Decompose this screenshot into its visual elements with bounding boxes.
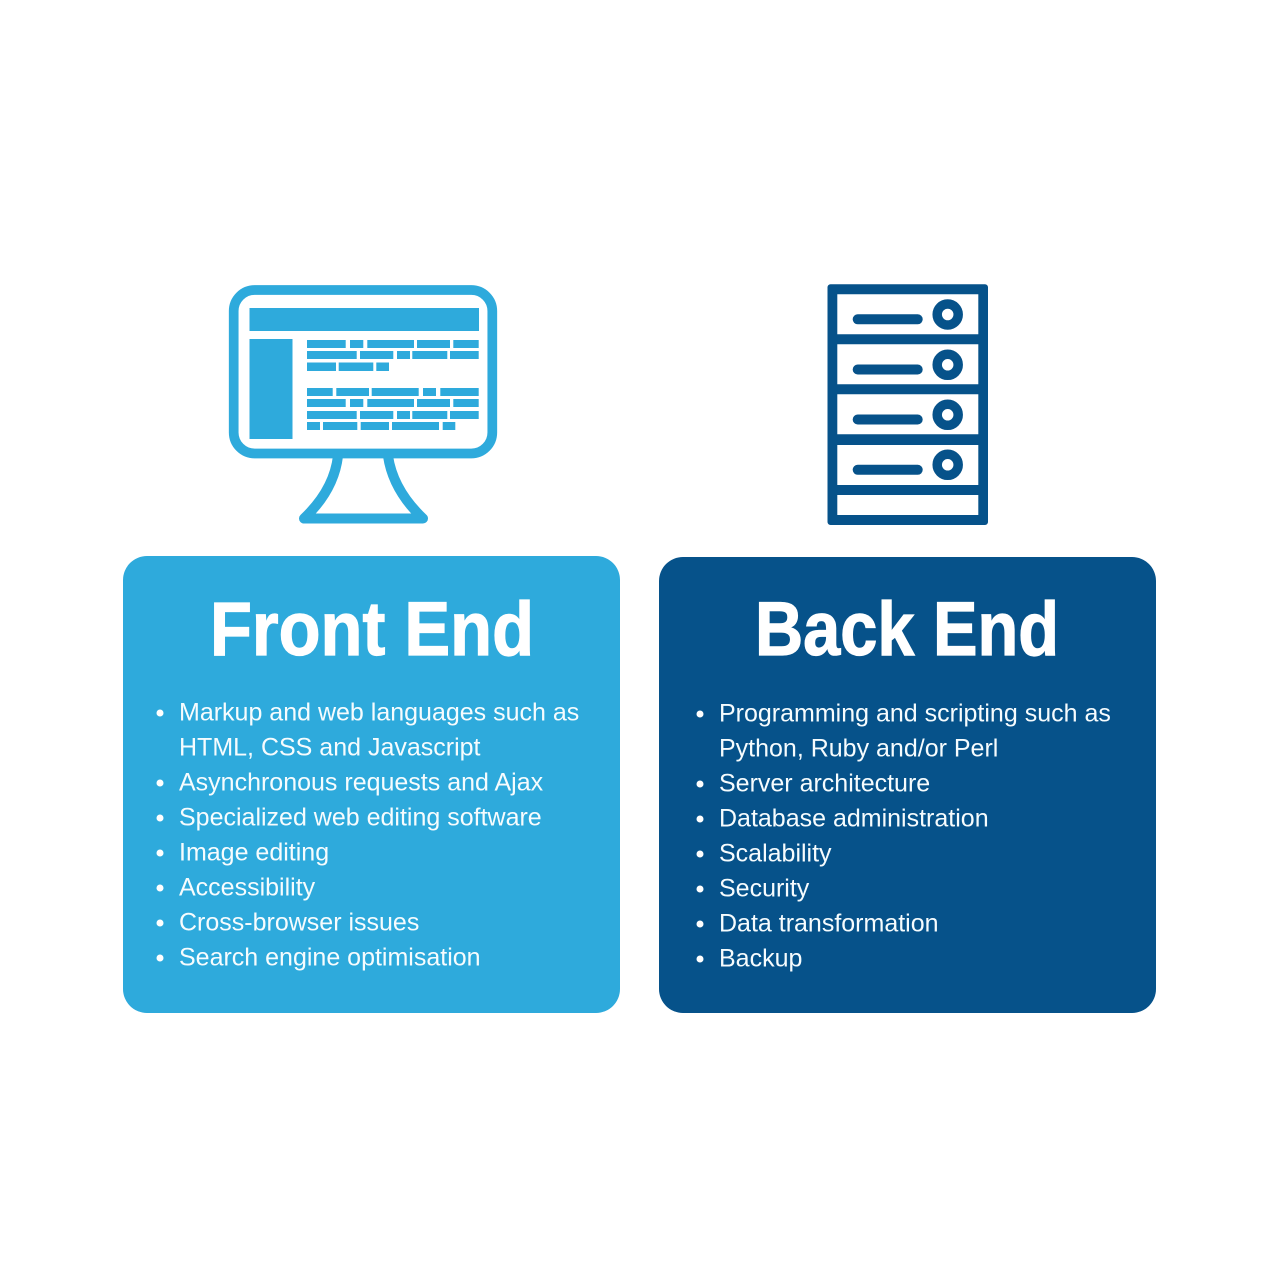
panel: back end <box>659 557 1156 1013</box>
list: front end skills <box>156 698 579 972</box>
list: front end skills: Search engine optimisation <box>179 944 481 972</box>
icon: desktop monitor <box>234 290 492 518</box>
list: back end skills: Python, Ruby and/or Perl <box>719 734 998 762</box>
icon: server rack <box>828 284 988 525</box>
list: back end skills: Security <box>719 874 810 902</box>
list: front end skills: Asynchronous requests and Ajax <box>179 768 544 796</box>
panel: front end <box>123 556 620 1013</box>
heading: front end: Front End <box>210 587 534 672</box>
list: back end skills: Server architecture <box>719 770 930 798</box>
list: back end skills: Scalability <box>719 840 832 868</box>
heading: back end: Back End <box>755 587 1059 672</box>
list: back end skills: Backup <box>719 944 802 972</box>
list: front end skills: Image editing <box>179 838 329 866</box>
list: front end skills: HTML, CSS and Javascript <box>179 734 481 762</box>
list: front end skills: Markup and web languages such as <box>179 698 579 726</box>
list: back end skills: Database administration <box>719 804 989 832</box>
list: front end skills: Accessibility <box>179 874 316 902</box>
list: front end skills: Cross-browser issues <box>179 908 419 936</box>
list: back end skills: Data transformation <box>719 910 939 938</box>
list: front end skills: Specialized web editing software <box>179 804 542 832</box>
list: back end skills: Programming and scripting such as <box>719 700 1111 728</box>
list: back end skills <box>696 700 1111 972</box>
